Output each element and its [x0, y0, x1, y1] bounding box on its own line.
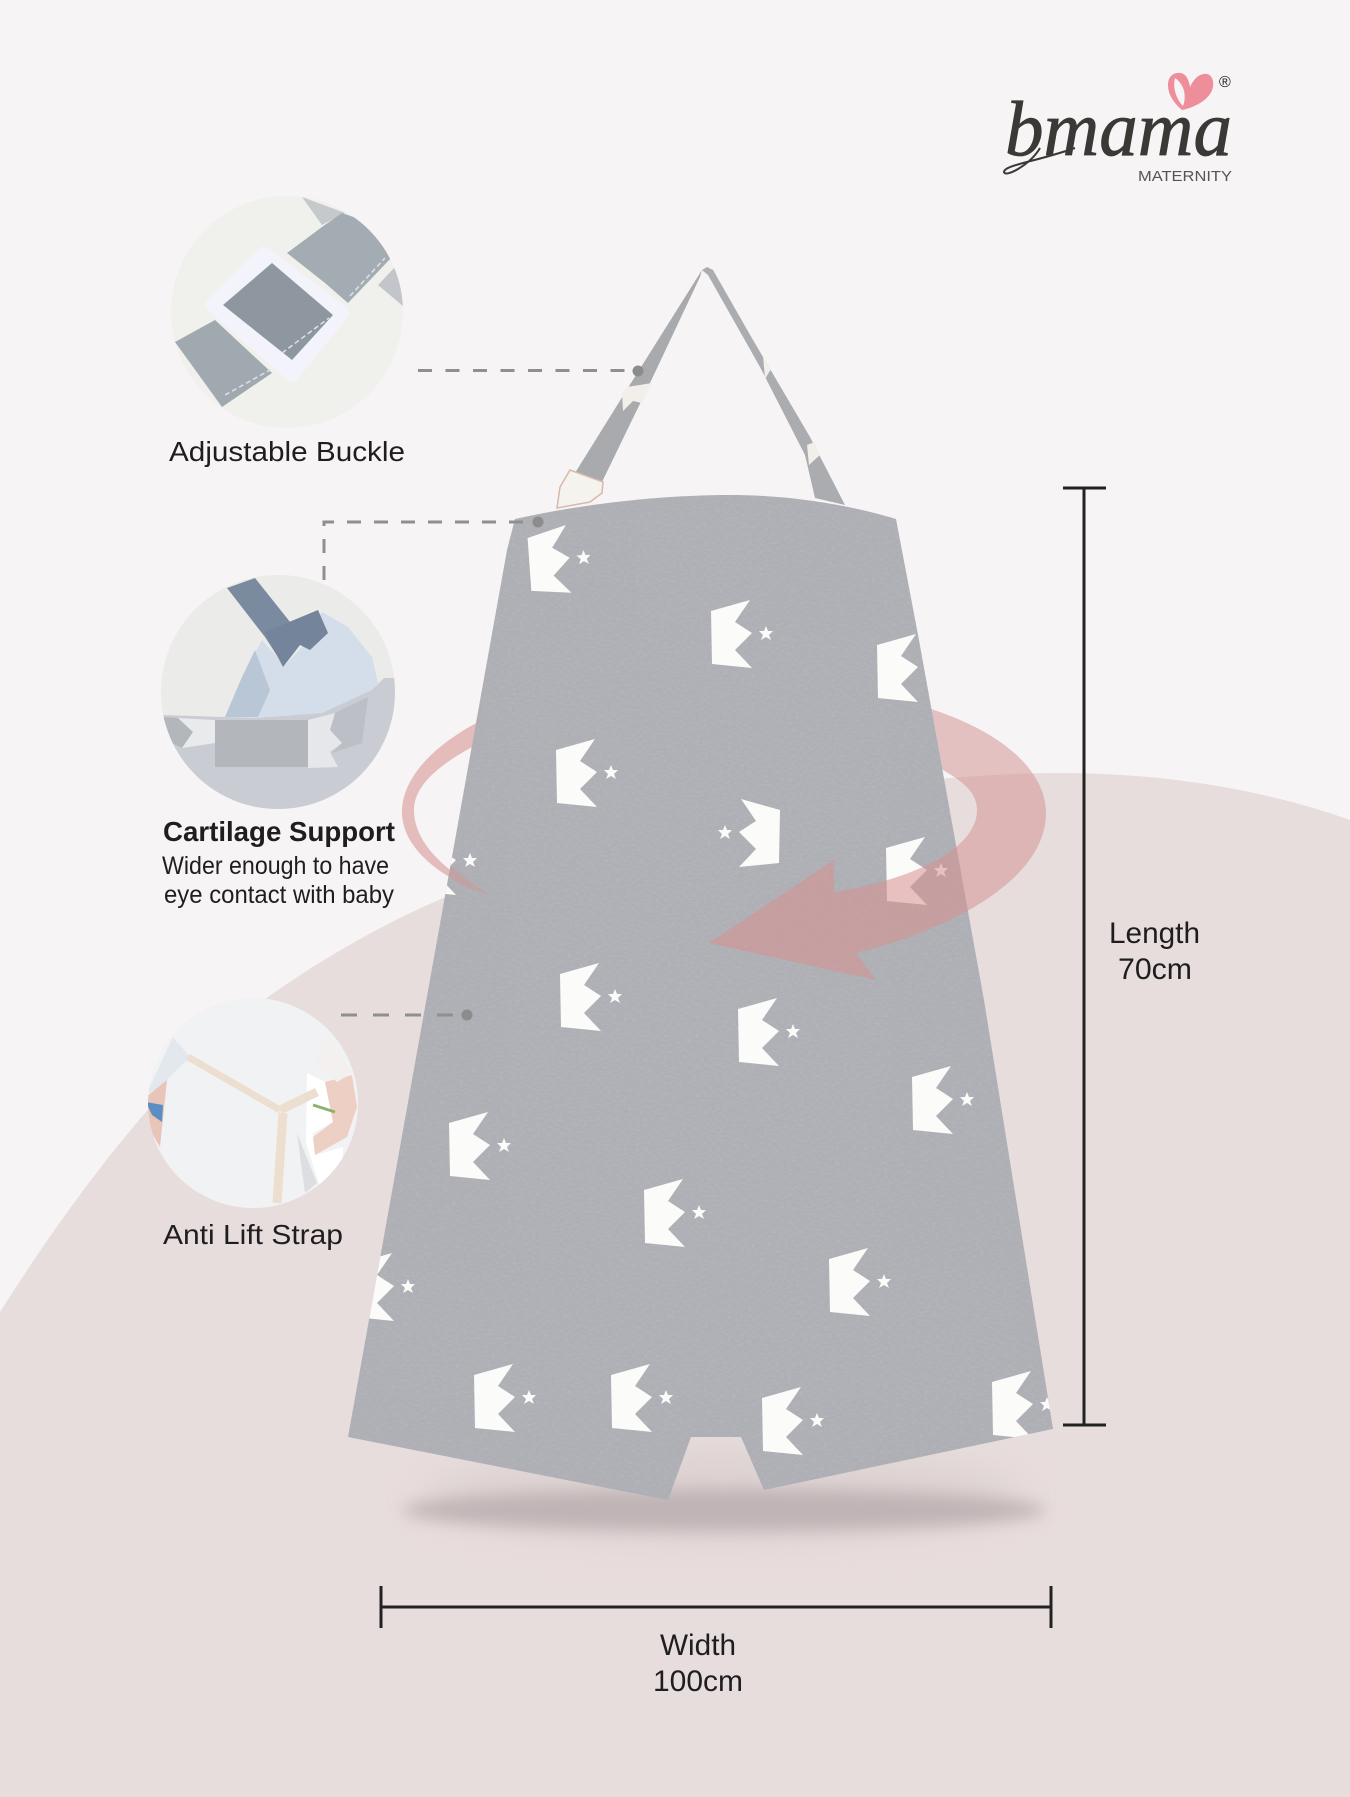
crown print pattern — [353, 524, 1054, 1455]
rotation arrow: front part over cover — [710, 847, 968, 980]
photo: anti lift strap — [145, 995, 361, 1211]
leader line: buckle — [418, 369, 630, 372]
width label: Width — [660, 1629, 736, 1662]
logo flourish — [1004, 148, 1075, 173]
leader line: anti lift strap — [341, 1014, 460, 1016]
nursing cover — [340, 480, 1060, 1510]
fabric texture — [340, 480, 1060, 1510]
label: adjustable buckle: Adjustable Buckle — [169, 436, 405, 467]
width label — [653, 1629, 743, 1698]
rotation arrow: full shape behind cover — [709, 700, 1046, 980]
photo: adjustable buckle — [170, 195, 405, 430]
registered mark: ® — [1219, 74, 1231, 91]
left strap — [575, 270, 702, 482]
floor shadow — [402, 1450, 1046, 1540]
width label: 100cm — [653, 1665, 743, 1698]
leader line: cartilage support — [324, 522, 532, 580]
right strap — [702, 267, 845, 505]
label: anti lift strap: Anti Lift Strap — [163, 1219, 343, 1250]
small buckle — [557, 470, 603, 508]
logo tagline: MATERNITY — [1138, 168, 1232, 185]
length label — [1109, 917, 1200, 986]
pink curved background — [0, 773, 1350, 1797]
logo wordmark: bmama — [1005, 85, 1232, 172]
heading: cartilage support: Cartilage Support — [163, 816, 395, 847]
cover fabric — [340, 480, 1060, 1510]
rotation arrow: left tail over cover — [448, 866, 490, 895]
length dimension bar — [1063, 488, 1106, 1425]
logo — [1004, 73, 1232, 185]
length label: Length — [1109, 917, 1200, 950]
text: cartilage description line 1: Wider enough to have — [162, 852, 389, 880]
rotation arrow: left arc behind cover — [402, 716, 490, 893]
width dimension bar — [381, 1586, 1051, 1628]
length label: 70cm — [1118, 953, 1192, 986]
leader dot: buckle — [632, 366, 644, 376]
leader dot: cartilage support — [532, 516, 544, 528]
logo heart — [1168, 73, 1213, 110]
text: cartilage description line 2: eye contact with baby — [164, 881, 394, 909]
photo: cartilage support — [158, 572, 400, 812]
leader dot: anti lift strap — [462, 1010, 472, 1020]
